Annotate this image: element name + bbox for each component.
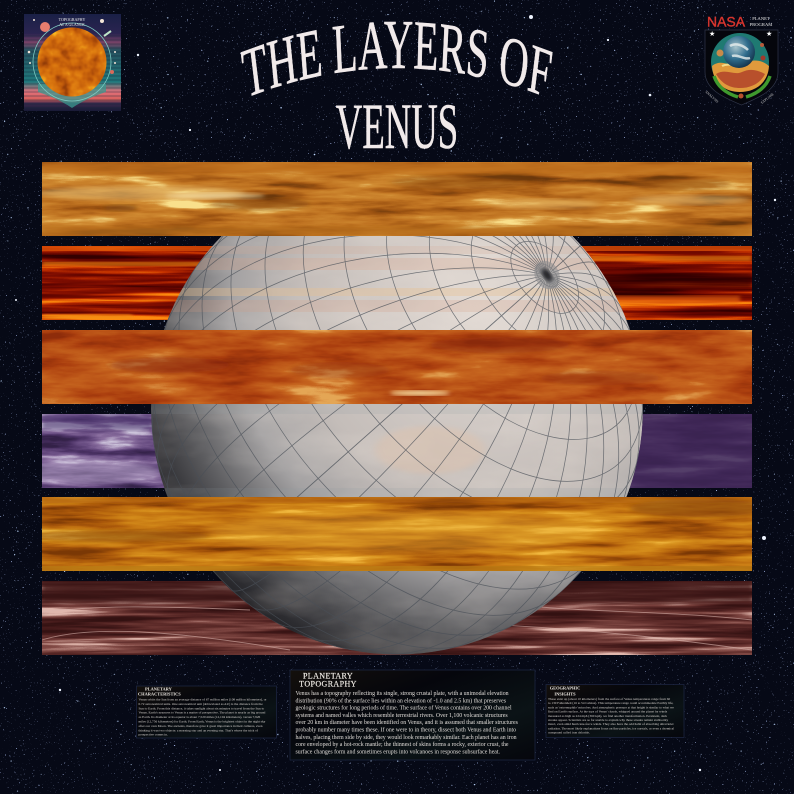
panel body text: surface changes form and sometimes erupts into volcanoes in response subsurface heat. bbox=[296, 748, 501, 755]
panel body text: miles (12,756 kilometers) for Earth. From Earth, Venus is the brightest object in the night sky bbox=[138, 720, 266, 724]
panel body text: intact, even amid hurricane-force winds. They also have the odd habit of absorbing ultraviolet bbox=[548, 722, 674, 727]
logo: topography at a glance: TOPOGRAPHY bbox=[59, 17, 86, 22]
title line one: THE LAYERS OF bbox=[240, 22, 553, 96]
panel heading: CHARACTERISTICS bbox=[138, 692, 181, 696]
logo: topography at a glance: AT A GLANCE bbox=[59, 22, 85, 27]
panel body text: find on Earth's surface. At the tops of Venus' clouds, whipped around the planet by winds bbox=[548, 710, 668, 715]
panel body text: compound called iron chloride. bbox=[548, 731, 590, 735]
band: top orange atmosphere layer bbox=[35, 162, 752, 236]
panel body text: to 130 Fahrenheit (16 to 54 Celsius). This temperature range could accommodate Earthly life, bbox=[548, 701, 674, 706]
panel body text: over 20 km in diameter have been identified on Venus, and it is assumed that smaller structures bbox=[296, 719, 519, 726]
panel body text: Venus orbits the Sun from an average distance of 67 million miles (108 million kilometers), or bbox=[138, 698, 267, 702]
logo: nasa planet program patch bbox=[704, 14, 778, 105]
panel body text: streaks appear. Scientists are so far unable to explain why these streaks remain stubbornly bbox=[548, 718, 668, 722]
logo: topography at a glance bbox=[24, 14, 121, 111]
polar vortex bbox=[534, 260, 560, 290]
panel heading: INSIGHTS bbox=[554, 692, 576, 696]
panel body text: perspective comes in. bbox=[138, 733, 168, 737]
panel: planetary characteristics bbox=[136, 686, 276, 738]
panel body text: measured as high as 224 mph (360 kph), we find another transformation. Persistent, dark bbox=[548, 714, 667, 719]
panel body text: Venus. Earth's nearness to Venus is a matter of perspective. The planet is nearly as big around bbox=[138, 711, 266, 715]
panel heading: PLANETARY bbox=[145, 686, 173, 692]
shield: ANALYSIS bbox=[704, 90, 719, 104]
panel body text: systems and named valles which resemble terrestrial rivers. Over 1,100 volcanic structures bbox=[296, 713, 508, 719]
shield: ★ bbox=[766, 30, 772, 38]
band: burnt orange layer bbox=[42, 330, 752, 404]
panel: geographic insights bbox=[546, 684, 684, 738]
panel body text: 0.72 astronomical units. One astronomical unit (abbreviated as AU) is the distance from the bbox=[138, 702, 263, 706]
panel heading: GEOGRAPHIC bbox=[550, 686, 580, 690]
panel body text: probably number many times these. If one were to in theory, dissect both Venus and Earth into bbox=[296, 726, 516, 734]
reflected colour bands bbox=[150, 246, 644, 497]
panel body text: thinking it was two objects: a morning star and an evening star. That's where the trick of bbox=[138, 728, 259, 732]
panel body text: geologic structures for long periods of time. The surface of Venus contains over 200 channel bbox=[296, 705, 512, 712]
panel heading: TOPOGRAPHY bbox=[299, 680, 357, 688]
band: maroon surface layer bbox=[42, 581, 752, 655]
shield: EXPLORE bbox=[760, 92, 775, 105]
panel body text: These exist up (about 10 kilometers) from the surface of Venus temperatures range from 60 bbox=[548, 697, 670, 701]
panel body text: Venus has a topography reflecting its single, strong crustal plate, with a unimodal elevation bbox=[296, 690, 509, 697]
band: golden layer bbox=[30, 497, 770, 571]
panel body text: distribution (90% of the surface lies within an elevation of -1.0 and 2.5 km) that preserves bbox=[296, 697, 507, 704]
band: deep red layer bbox=[42, 246, 752, 320]
panel body text: such as 'extremophile' microbes. And atmospheric pressure at that height is similar to what we bbox=[548, 705, 674, 709]
shield: ★ bbox=[709, 30, 715, 38]
panel body text: radiation. The most likely explanations focus on fine particles, ice crystals, or even a chemical bbox=[548, 726, 674, 731]
latitude and longitude grid bbox=[152, 236, 643, 654]
planet program label: PROGRAM bbox=[750, 22, 772, 27]
shield bbox=[704, 30, 778, 105]
nasa wordmark: NASA bbox=[707, 14, 746, 30]
title line two: VENUS bbox=[336, 91, 458, 163]
venus globe bbox=[151, 236, 643, 654]
panel body text: core enveloped by a hot-rock mantle; the thinnest of skins forms a rocky, exterior crust, the bbox=[296, 741, 509, 748]
panel body text: halves, placing them side by side, they would look remarkably similar. Each planet has an iron bbox=[296, 735, 517, 741]
panel body text: after our own Moon. The ancients, therefore gave it great importance in their cultures, even bbox=[138, 724, 263, 729]
planet program label: PLANET bbox=[752, 16, 770, 21]
band: purple layer bbox=[20, 414, 752, 488]
panel body text: as Earth. Its diameter at its equator is about 7,520 miles (12,104 kilometers), versus 7,926 bbox=[138, 715, 261, 720]
panel body text: Sun to Earth. From this distance, it takes sunlight about six minutes to travel from the Sun to bbox=[138, 706, 265, 711]
title bbox=[240, 22, 553, 163]
panel: planetary topography bbox=[290, 670, 535, 760]
panel heading: PLANETARY bbox=[303, 672, 353, 680]
